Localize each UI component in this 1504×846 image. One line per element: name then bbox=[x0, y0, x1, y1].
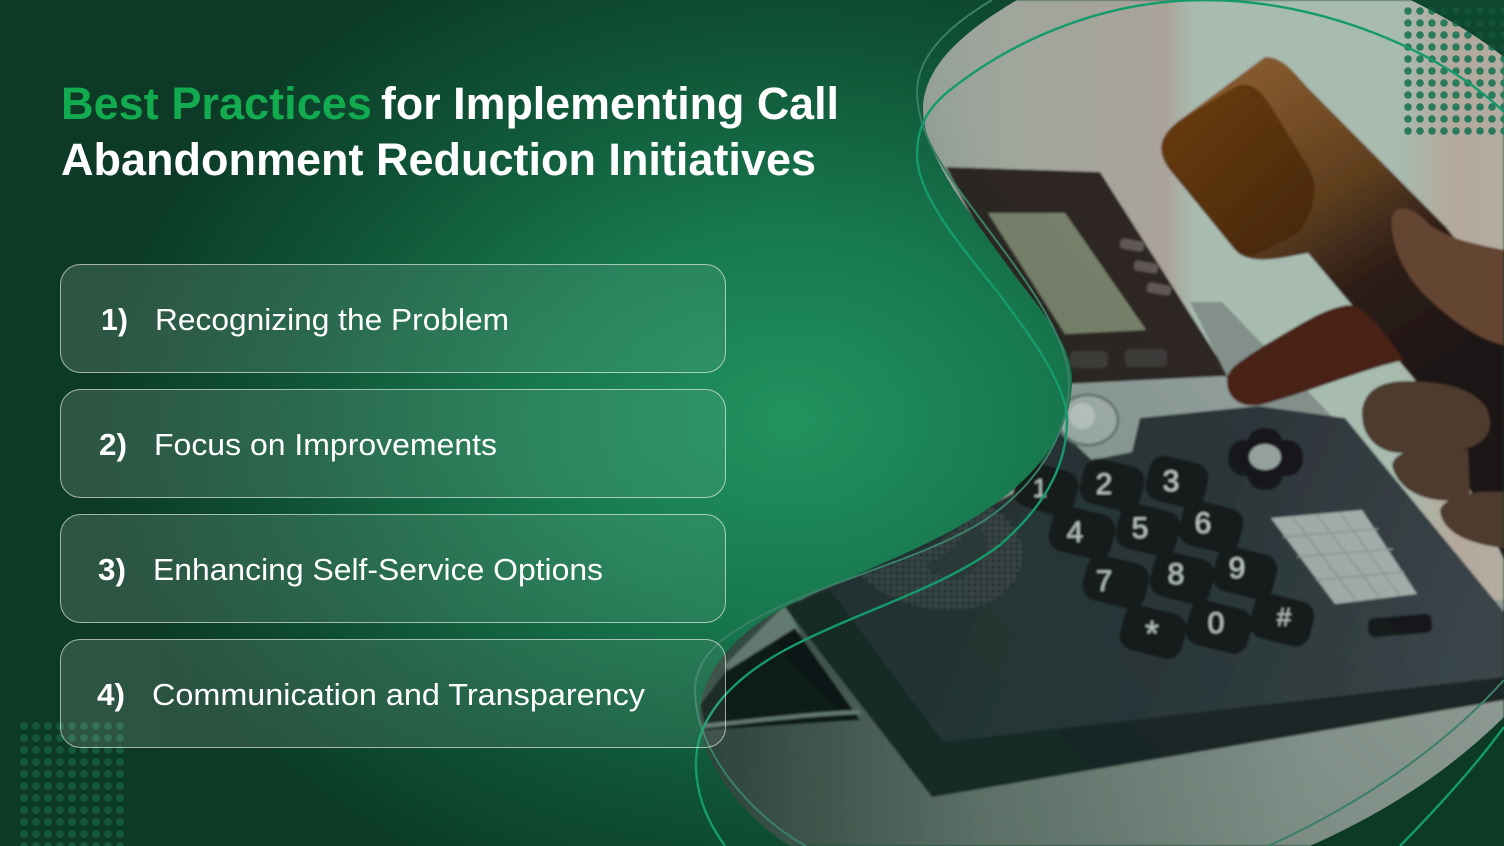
silver control plate bbox=[1058, 376, 1258, 460]
index finger bbox=[1227, 305, 1404, 406]
card 1 text: Recognizing the Problem bbox=[155, 302, 509, 337]
decorative outer line bbox=[695, 0, 1504, 846]
title highlight: Best Practices bbox=[61, 78, 372, 129]
wall backdrop bbox=[796, 0, 1504, 602]
keypad keys: 9 bbox=[1229, 552, 1245, 585]
keypad keys: 6 bbox=[1195, 507, 1211, 540]
card 4 text: Communication and Transparency bbox=[152, 677, 646, 712]
small key bbox=[1367, 613, 1433, 638]
phone front lip and side bbox=[785, 590, 1504, 797]
thumb bbox=[1392, 208, 1504, 345]
keypad keys: 4 bbox=[1067, 516, 1083, 549]
dot pattern top right bbox=[1402, 5, 1504, 137]
keypad keys: 2 bbox=[1096, 468, 1112, 501]
keypad keys: 7 bbox=[1096, 565, 1112, 598]
keypad keys: 3 bbox=[1163, 465, 1179, 498]
speaker grille bbox=[860, 505, 1022, 610]
top-right dark corner bbox=[1411, 0, 1504, 57]
title bbox=[61, 78, 839, 185]
phone body slope bbox=[1190, 301, 1332, 418]
decorative bright line bbox=[696, 0, 1504, 846]
keypad keys: 0 bbox=[1208, 607, 1224, 640]
card 3 number: 3) bbox=[98, 552, 126, 587]
handset earpiece bbox=[1161, 85, 1314, 256]
card 4 bbox=[60, 640, 726, 748]
desk surface bbox=[690, 600, 1504, 846]
title line two: Abandonment Reduction Initiatives bbox=[61, 134, 816, 185]
green tint overlay bbox=[700, 398, 1424, 846]
keypad keys: 8 bbox=[1168, 558, 1184, 591]
phone body bbox=[791, 404, 1504, 744]
card 3 bbox=[60, 514, 726, 622]
title line one: for Implementing Call bbox=[381, 78, 839, 129]
keypad keys: # bbox=[1277, 602, 1292, 632]
card 1 number: 1) bbox=[101, 302, 128, 337]
keypad keys: 5 bbox=[1132, 512, 1148, 545]
card 2 number: 2) bbox=[99, 427, 127, 462]
keypad keys: * bbox=[1145, 613, 1159, 654]
phone display panel bbox=[946, 167, 1232, 400]
card 3 text: Enhancing Self-Service Options bbox=[153, 552, 603, 587]
keypad keys: 1 bbox=[1033, 473, 1047, 503]
lower fingers bbox=[1362, 381, 1504, 548]
photo: hand holding phone handset over desk phone bbox=[690, 0, 1504, 846]
card 1 bbox=[60, 264, 726, 372]
phone stand bbox=[700, 605, 860, 730]
card 4 number: 4) bbox=[97, 677, 125, 712]
dot pattern bottom left bbox=[18, 720, 126, 846]
card 2 bbox=[60, 390, 726, 498]
navigation button bbox=[1228, 428, 1303, 490]
card 2 text: Focus on Improvements bbox=[154, 427, 497, 462]
label key grid bbox=[1271, 510, 1417, 604]
handset bbox=[1161, 57, 1504, 560]
keypad keys bbox=[1010, 452, 1318, 662]
